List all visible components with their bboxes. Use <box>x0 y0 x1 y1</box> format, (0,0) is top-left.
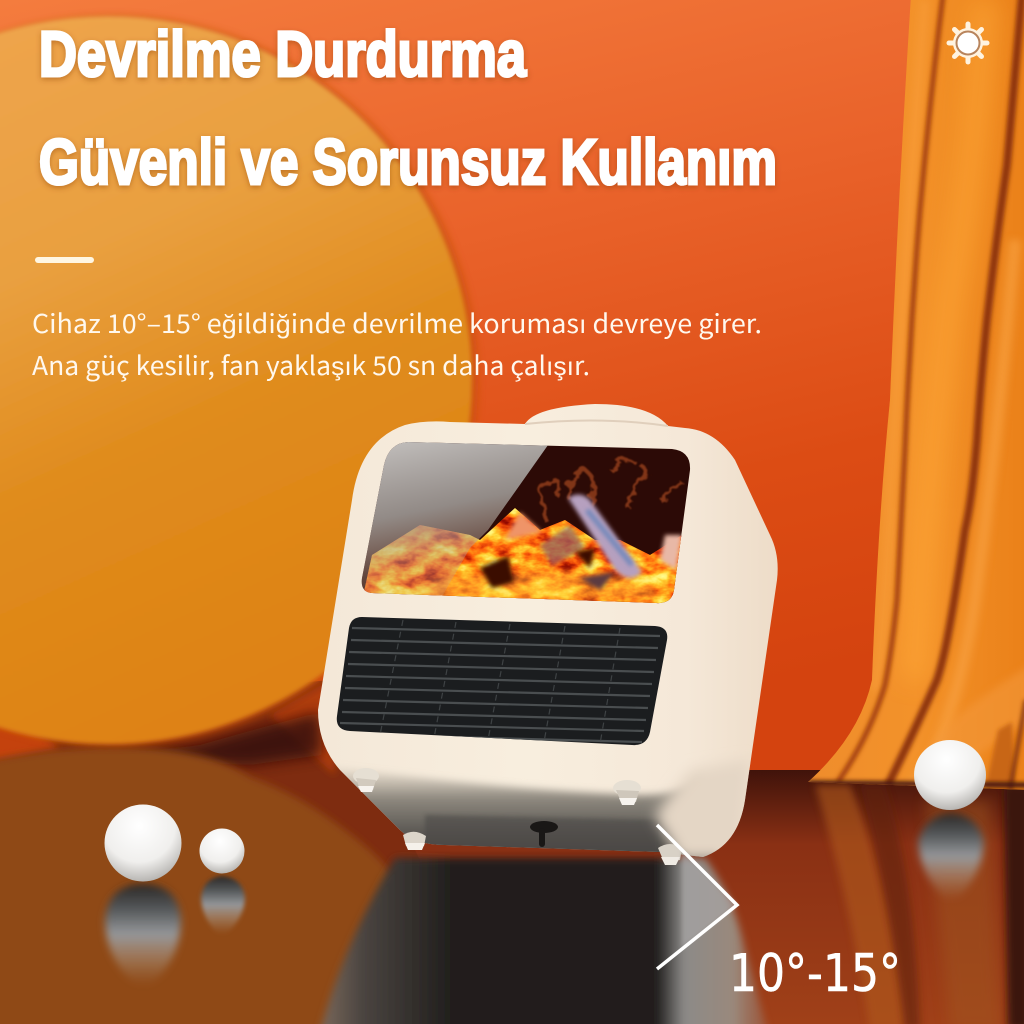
title <box>39 18 777 198</box>
flame bed <box>360 508 682 612</box>
curtain reflections <box>815 785 905 1024</box>
curtain <box>800 0 1024 795</box>
fold 1 <box>838 0 943 782</box>
description text: Cihaz 10°–15° eğildiğinde devrilme koruması devreye girer. <box>32 304 762 341</box>
logs <box>568 494 642 578</box>
glossy floor <box>0 680 1024 1024</box>
heater shell <box>318 404 778 857</box>
angle label: 10°-15° <box>729 944 901 1004</box>
heater grille <box>336 617 668 746</box>
tilt angle marker <box>657 825 737 969</box>
heater feet <box>353 768 682 865</box>
title: Devrilme Durdurma <box>39 18 526 90</box>
fold 2 <box>888 0 1022 785</box>
flame window <box>362 442 690 604</box>
heater reflection on floor <box>318 858 770 1024</box>
heater handle shadow line <box>525 420 668 426</box>
background orange disc <box>0 16 478 746</box>
brown disc reflection <box>0 747 395 1024</box>
title: Güvenli ve Sorunsuz Kullanım <box>39 126 777 198</box>
white balls <box>104 740 986 985</box>
icon: sun <box>949 24 987 62</box>
glass reflection <box>362 442 548 596</box>
heater underside <box>320 760 750 860</box>
background wall <box>0 0 1024 790</box>
accent dash <box>35 257 94 263</box>
description text: Ana güç kesilir, fan yaklaşık 50 sn daha çalışır. <box>32 346 590 383</box>
description text <box>32 304 762 383</box>
heater <box>318 404 778 865</box>
power cord plug <box>530 821 558 847</box>
